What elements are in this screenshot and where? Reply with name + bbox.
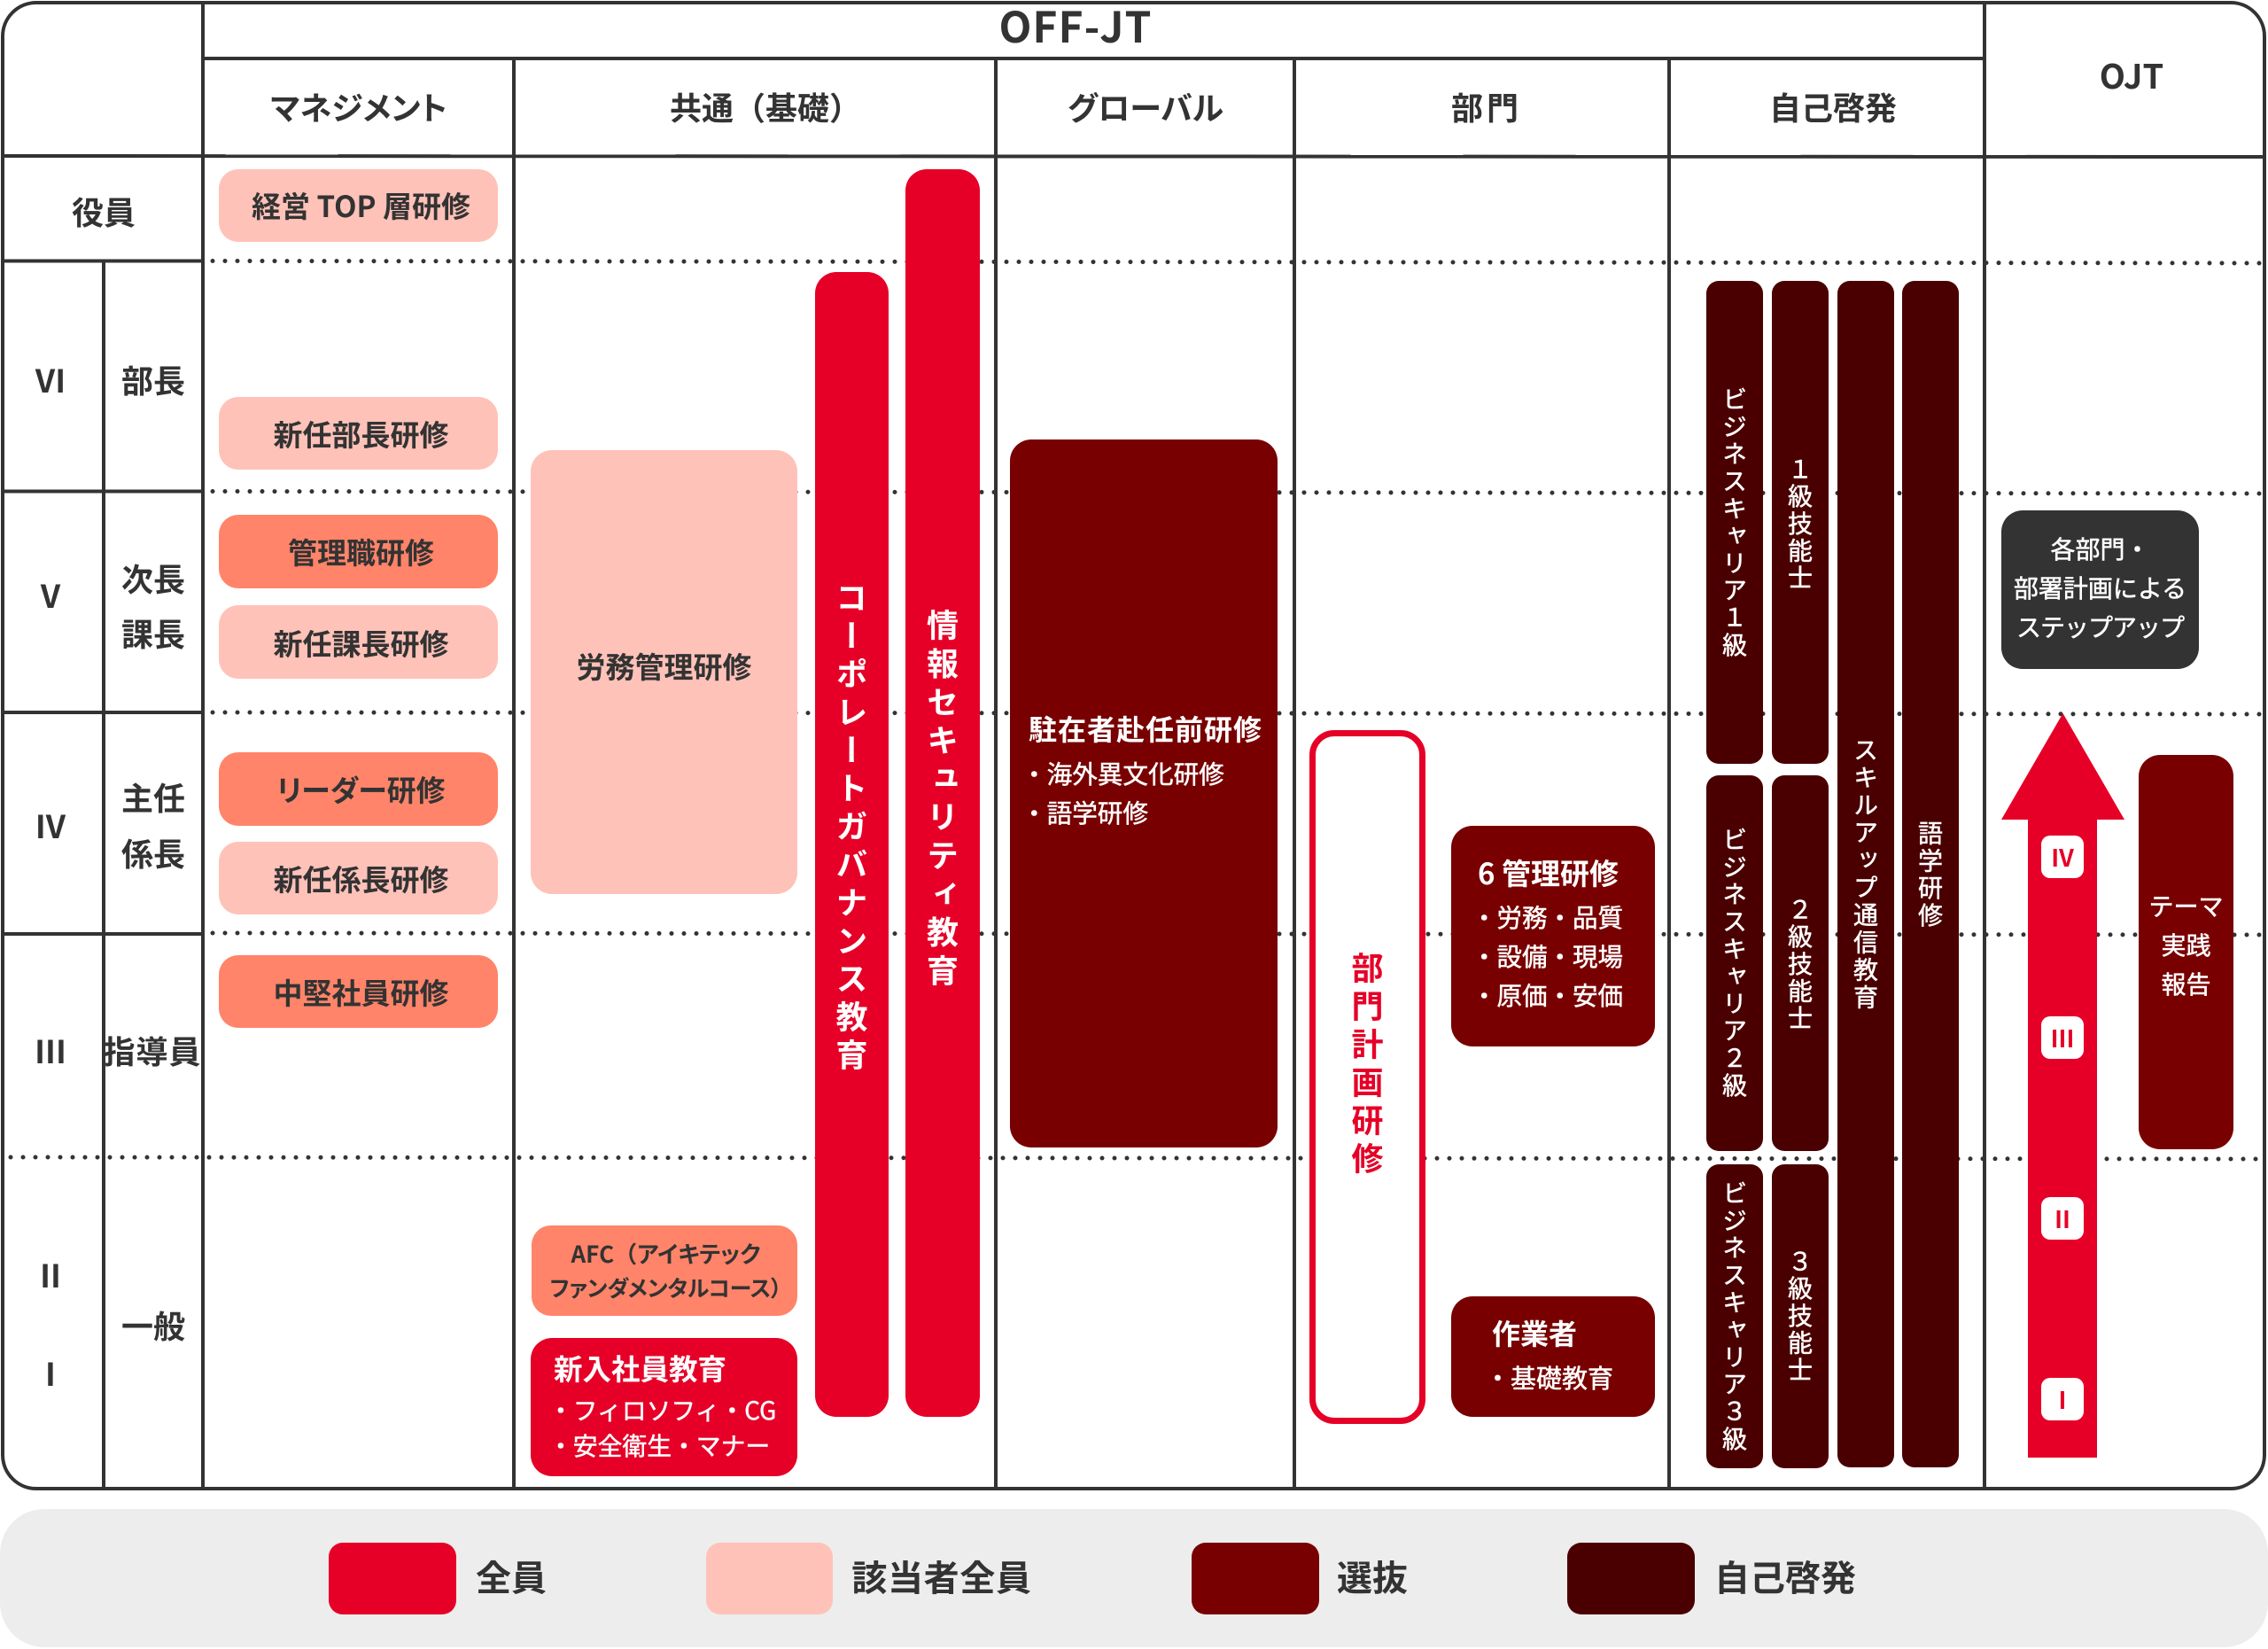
box: AFC: AFC（アイキテック <box>571 1237 760 1270</box>
box: 経営TOP層研修: 経営 TOP 層研修 <box>252 183 470 225</box>
6管理研修 list: ・労務・品質 <box>1472 898 1623 935</box>
新入社員教育 list <box>548 1392 776 1463</box>
box: 各部門・部署計画によるステップアップ: ステップアップ <box>2016 608 2184 643</box>
box: 部門計画研修 <box>1309 730 1425 1424</box>
6管理研修 list <box>1472 898 1623 1013</box>
legend label: 該当者全員: 該当者全員 <box>851 1550 1032 1601</box>
header: 部門: 部門 <box>1451 83 1522 129</box>
box: 各部門・部署計画によるステップアップ <box>2001 510 2199 669</box>
header: マネジメント: マネジメント <box>270 83 447 129</box>
grade: VI: VI <box>35 356 66 402</box>
bar: 3級技能士: ３級技能士 <box>1783 1248 1818 1384</box>
row label: 役員: 役員 <box>72 188 136 234</box>
作業者 title: 作業者 <box>1492 1312 1577 1353</box>
6管理研修 title: 6 管理研修 <box>1478 851 1619 893</box>
grade: II: II <box>40 1251 61 1297</box>
box: 管理職研修 <box>219 515 498 588</box>
badge: I <box>2041 1378 2084 1420</box>
新入社員教育 title: 新入社員教育 <box>554 1347 726 1388</box>
新入社員教育 list: ・フィロソフィ・CG <box>548 1392 776 1427</box>
6管理研修 list: ・設備・現場 <box>1472 937 1623 974</box>
bar: 情報セキュリティ教育: 情報セキュリティ教育 <box>920 609 966 992</box>
box: AFC <box>532 1225 797 1316</box>
row label: 部長: 部長 <box>121 356 185 402</box>
box: 新任課長研修: 新任課長研修 <box>273 621 448 664</box>
row label: 一般: 一般 <box>121 1302 185 1348</box>
header: グローバル: グローバル <box>1068 83 1223 129</box>
row label: 主任: 主任 <box>121 774 185 820</box>
header: OJT: OJT <box>2100 50 2163 98</box>
badge: IV: IV <box>2051 838 2074 874</box>
badge: III: III <box>2051 1019 2074 1054</box>
bar: ビジネスキャリア2級: ビジネスキャリア２級 <box>1717 827 1752 1100</box>
arrow: career step up with grades <box>2001 713 2124 1458</box>
box: 新任係長研修 <box>219 842 498 914</box>
swatch: 自己啓発 <box>1567 1543 1695 1614</box>
bar: コーポレートガバナンス教育 <box>815 272 889 1417</box>
box: 新任係長研修: 新任係長研修 <box>273 856 448 898</box>
box: 管理職研修: 管理職研修 <box>288 530 434 572</box>
badge: II <box>2041 1197 2084 1240</box>
grade: IV: IV <box>35 802 66 848</box>
legend label: 自己啓発: 自己啓発 <box>1714 1550 1856 1601</box>
legend label: 全員: 全員 <box>476 1550 547 1601</box>
box: テーマ実践報告: テーマ <box>2148 888 2224 923</box>
box: テーマ実践報告: 実践 <box>2161 927 2211 962</box>
bar: 1級技能士 <box>1772 281 1829 764</box>
badge: IV <box>2041 836 2084 878</box>
bar: 語学研修 <box>1902 281 1959 1467</box>
box: AFC: ファンダメンタルコース） <box>550 1272 781 1303</box>
header: 共通（基礎）: 共通（基礎） <box>670 83 861 129</box>
box: 新任部長研修 <box>219 397 498 470</box>
badge: III <box>2041 1016 2084 1059</box>
bar: ビジネスキャリア3級 <box>1706 1164 1763 1468</box>
box: 新任部長研修: 新任部長研修 <box>273 411 448 454</box>
bar: 2級技能士: ２級技能士 <box>1783 897 1818 1032</box>
駐在者赴任前研修 list <box>1021 755 1224 830</box>
bar: コーポレートガバナンス教育: コーポレートガバナンス教育 <box>829 581 875 1077</box>
box: 各部門・部署計画によるステップアップ: 部署計画による <box>2014 569 2186 604</box>
legend label: 選抜: 選抜 <box>1337 1550 1408 1601</box>
box: 作業者 <box>1451 1296 1655 1417</box>
box: 各部門・部署計画によるステップアップ: 各部門・ <box>2050 530 2149 565</box>
bar: ビジネスキャリア1級 <box>1706 281 1763 764</box>
swatch: 全員 <box>329 1543 456 1614</box>
row label: 次長: 次長 <box>121 555 185 601</box>
box: 経営TOP層研修 <box>219 169 498 242</box>
bar: 情報セキュリティ教育 <box>905 169 980 1417</box>
box: 中堅社員研修: 中堅社員研修 <box>273 969 448 1012</box>
grade: III: III <box>35 1027 66 1073</box>
bar: 1級技能士: １級技能士 <box>1783 456 1818 592</box>
bar: ビジネスキャリア2級 <box>1706 775 1763 1151</box>
grade: I: I <box>45 1350 56 1396</box>
box: 中堅社員研修 <box>219 955 498 1028</box>
bar: スキルアップ通信教育: スキルアップ通信教育 <box>1848 737 1884 1012</box>
box: 6管理研修 <box>1451 826 1655 1046</box>
box: 労務管理研修: 労務管理研修 <box>576 644 751 687</box>
grade: V: V <box>41 572 60 618</box>
box: 新入社員教育 <box>531 1338 797 1476</box>
box: 駐在者赴任前研修 <box>1010 439 1278 1147</box>
bar: ビジネスキャリア3級: ビジネスキャリア３級 <box>1717 1180 1752 1453</box>
row label: 課長: 課長 <box>121 610 185 656</box>
駐在者赴任前研修 list: ・語学研修 <box>1021 794 1148 830</box>
駐在者赴任前研修 title: 駐在者赴任前研修 <box>1029 708 1262 749</box>
swatch: 選抜 <box>1192 1543 1319 1614</box>
row label: 係長: 係長 <box>121 829 185 875</box>
6管理研修 list: ・原価・安価 <box>1472 976 1623 1013</box>
box: 新任課長研修 <box>219 605 498 679</box>
bar: 語学研修: 語学研修 <box>1913 821 1948 930</box>
box: テーマ実践報告: 報告 <box>2161 966 2211 1001</box>
駐在者赴任前研修 list: ・海外異文化研修 <box>1021 755 1224 791</box>
swatch: 該当者全員 <box>706 1543 833 1614</box>
bar: スキルアップ通信教育 <box>1837 281 1894 1467</box>
作業者 list: ・基礎教育 <box>1485 1358 1613 1396</box>
legend panel <box>0 1509 2268 1647</box>
badge: II: II <box>2054 1200 2070 1235</box>
box: テーマ実践報告 <box>2139 755 2233 1149</box>
bar: 2級技能士 <box>1772 775 1829 1151</box>
header: 自己啓発: 自己啓発 <box>1769 83 1897 129</box>
arrow shape <box>2001 713 2124 1458</box>
badge: I: I <box>2059 1381 2066 1416</box>
新入社員教育 list: ・安全衛生・マナー <box>548 1427 770 1463</box>
row label: 指導員: 指導員 <box>103 1027 202 1073</box>
bar: 3級技能士 <box>1772 1164 1829 1468</box>
box: 部門計画研修: 部門計画研修 <box>1345 952 1391 1180</box>
box: 労務管理研修 <box>531 450 797 894</box>
box: リーダー研修 <box>219 752 498 826</box>
box: リーダー研修: リーダー研修 <box>276 767 446 810</box>
bar: ビジネスキャリア1級: ビジネスキャリア１級 <box>1717 386 1752 659</box>
